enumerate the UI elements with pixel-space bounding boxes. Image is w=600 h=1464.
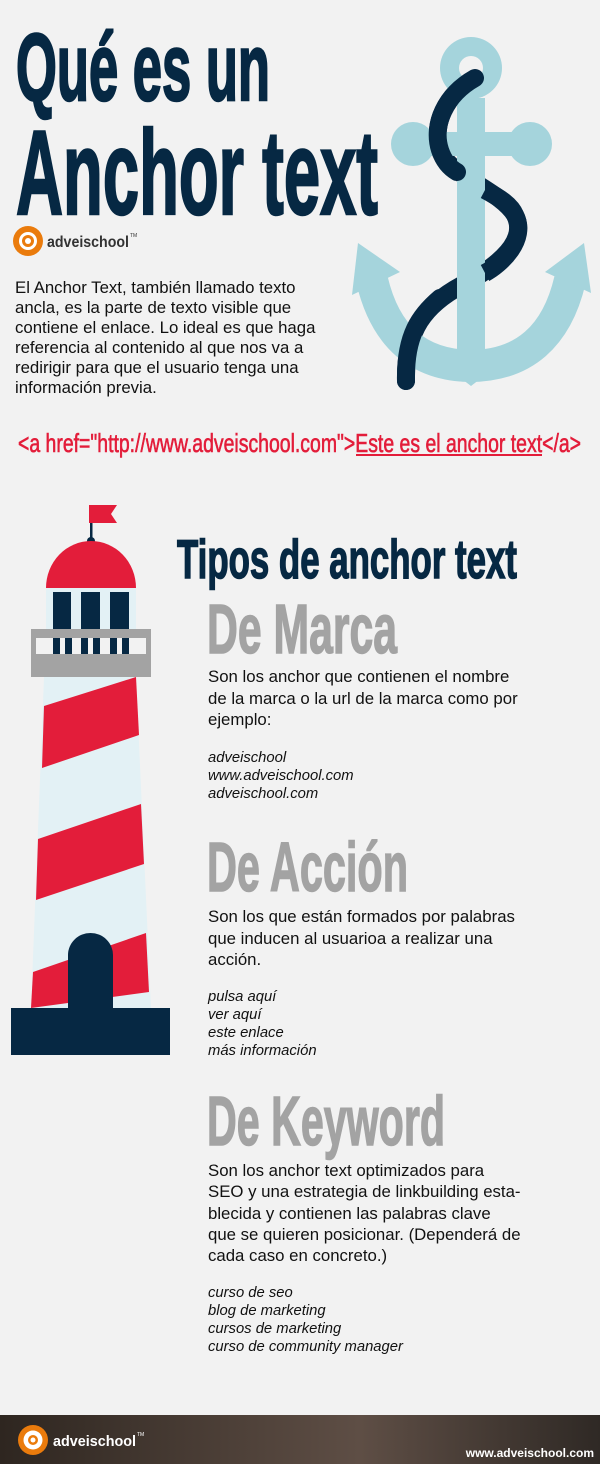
footer: www.adveischool.com <box>465 1446 594 1460</box>
list: de accion: pulsa aquí <box>208 989 276 1005</box>
list: de keyword <box>208 1285 404 1355</box>
list: de marca: adveischool.com <box>208 786 318 802</box>
text: de keyword: SEO y una estrategia de linkbuilding esta- <box>208 1182 521 1201</box>
list: de keyword: curso de seo <box>208 1285 293 1301</box>
text: de marca <box>208 667 518 729</box>
logo: adveischool <box>13 226 137 256</box>
heading: de marca: De Marca <box>207 590 398 668</box>
icon: lighthouse <box>11 505 170 1055</box>
text: de keyword: cada caso en concreto.) <box>208 1246 387 1265</box>
text: de keyword: blecida y contienen las palabras clave <box>208 1204 491 1223</box>
text: de marca: ejemplo: <box>208 710 271 729</box>
list: de marca: adveischool <box>208 750 286 766</box>
icon: anchor <box>352 37 591 386</box>
footer: adveischool <box>53 1433 136 1450</box>
logo: adveischool: adveischool <box>47 234 129 251</box>
text: de marca: de la marca o la url de la marca como por <box>208 688 518 708</box>
list: de accion: más información <box>208 1043 317 1059</box>
text: de keyword: que se quieren posicionar. (Dependerá de <box>208 1225 521 1244</box>
intro text: ancla, es la parte de texto visible que <box>15 298 291 317</box>
intro text: contiene el enlace. Lo ideal es que haga <box>15 318 315 337</box>
footer <box>0 1415 600 1464</box>
text: de accion: Son los que están formados por palabras <box>208 907 515 926</box>
list: de keyword: blog de marketing <box>208 1303 326 1319</box>
list: de keyword: cursos de marketing <box>208 1321 341 1337</box>
list: de marca: www.adveischool.com <box>208 768 354 784</box>
list: de marca <box>208 750 354 802</box>
list: de keyword: curso de community manager <box>208 1339 403 1355</box>
title: Qué es un <box>16 14 270 121</box>
title <box>16 14 378 240</box>
text: de keyword: Son los anchor text optimizados para <box>208 1161 484 1180</box>
intro text: El Anchor Text, también llamado texto <box>15 278 295 297</box>
intro text: referencia al contenido al que nos va a <box>15 338 303 357</box>
text: de keyword <box>208 1161 521 1265</box>
intro text: redirigir para que el usuario tenga una <box>15 358 299 377</box>
text: de accion: acción. <box>208 950 261 969</box>
list: de accion <box>208 989 317 1059</box>
text: de accion <box>208 907 515 969</box>
heading: de accion: De Acción <box>207 828 408 906</box>
list: de accion: este enlace <box>208 1025 284 1041</box>
footer: TM <box>137 1432 144 1438</box>
text: de accion: que inducen al usuarioa a realizar una <box>208 928 493 948</box>
text: de marca: Son los anchor que contienen el nombre <box>208 667 509 686</box>
intro text: información previa. <box>15 378 157 397</box>
intro text <box>15 278 316 397</box>
logo: adveischool: TM <box>130 233 137 239</box>
heading: de keyword: De Keyword <box>207 1082 445 1160</box>
list: de accion: ver aquí <box>208 1007 261 1023</box>
